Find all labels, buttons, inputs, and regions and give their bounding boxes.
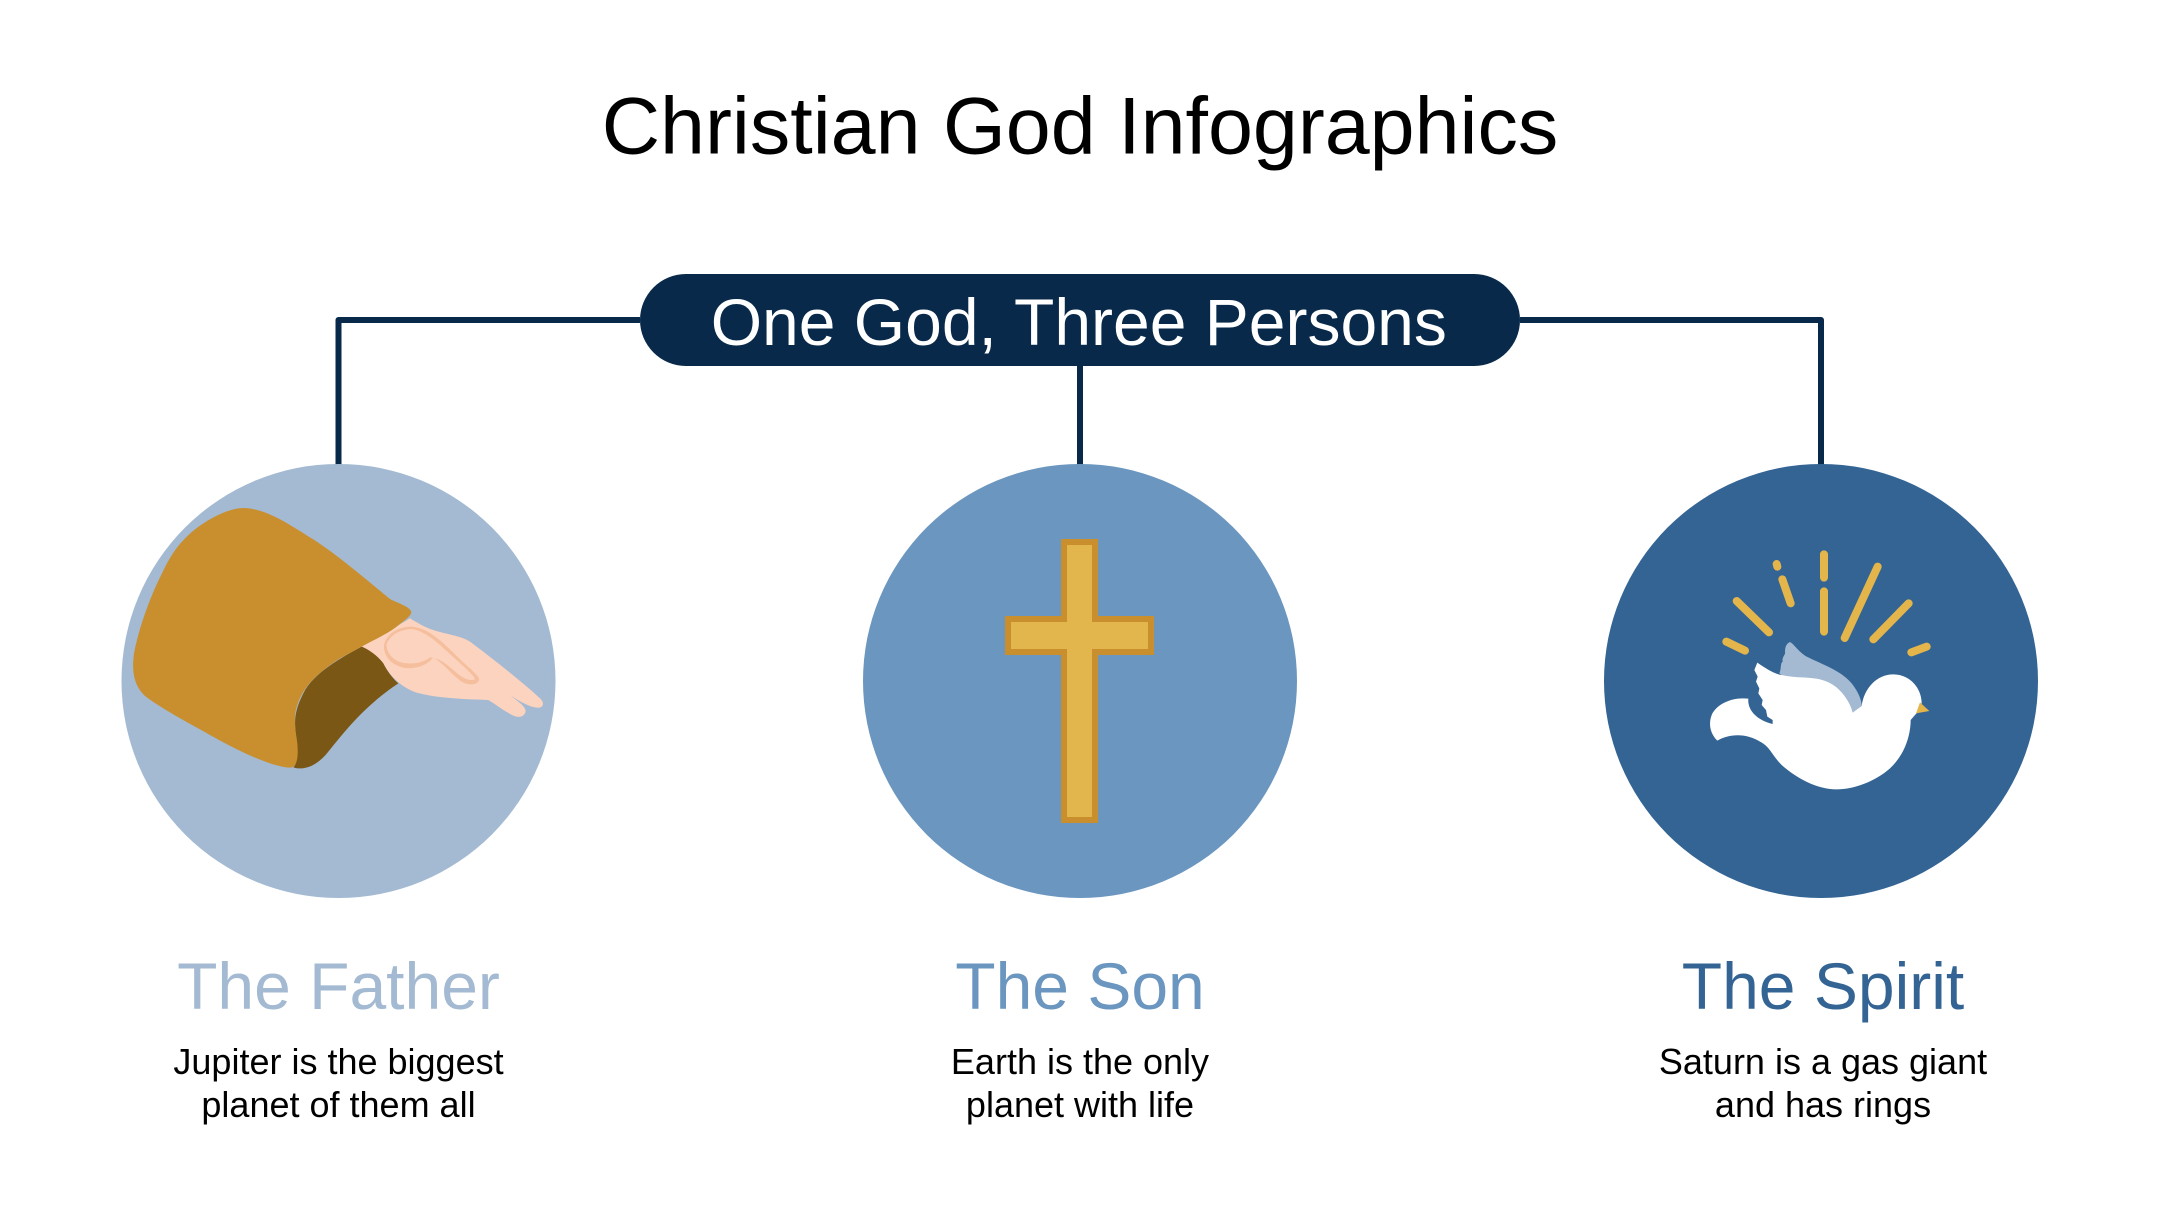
icon: hand from sleeve bbox=[133, 508, 543, 768]
description: the father: Jupiter is the biggest bbox=[173, 1041, 504, 1082]
icon: dove with rays bbox=[1710, 554, 1929, 789]
panel: the son bbox=[863, 464, 1297, 1125]
dove back wing bbox=[1779, 642, 1862, 713]
heading: the father: The Father bbox=[177, 949, 500, 1023]
dove beak bbox=[1916, 702, 1929, 713]
heading: the spirit: The Spirit bbox=[1682, 949, 1964, 1023]
panel: the spirit bbox=[1604, 464, 2038, 1125]
circle: son background bbox=[863, 464, 1297, 898]
description: the son: Earth is the only bbox=[951, 1041, 1209, 1082]
dove body bbox=[1710, 663, 1922, 789]
rays of light bbox=[1726, 554, 1927, 652]
connector lines bbox=[338, 320, 1821, 470]
heading: the son: The Son bbox=[955, 949, 1205, 1023]
description: the son: planet with life bbox=[966, 1084, 1194, 1125]
banner: one god, three persons: One God, Three Persons bbox=[711, 285, 1447, 359]
circle: father background bbox=[122, 464, 556, 898]
banner: one god, three persons bbox=[640, 274, 1520, 366]
icon: cross bbox=[1008, 542, 1151, 820]
description: the spirit: and has rings bbox=[1715, 1084, 1931, 1125]
panel: the father bbox=[122, 464, 556, 1125]
description: the spirit: Saturn is a gas giant bbox=[1659, 1041, 1987, 1082]
circle: spirit background bbox=[1604, 464, 2038, 898]
description: the father: planet of them all bbox=[201, 1084, 476, 1125]
title: Christian God Infographics bbox=[602, 82, 1558, 172]
